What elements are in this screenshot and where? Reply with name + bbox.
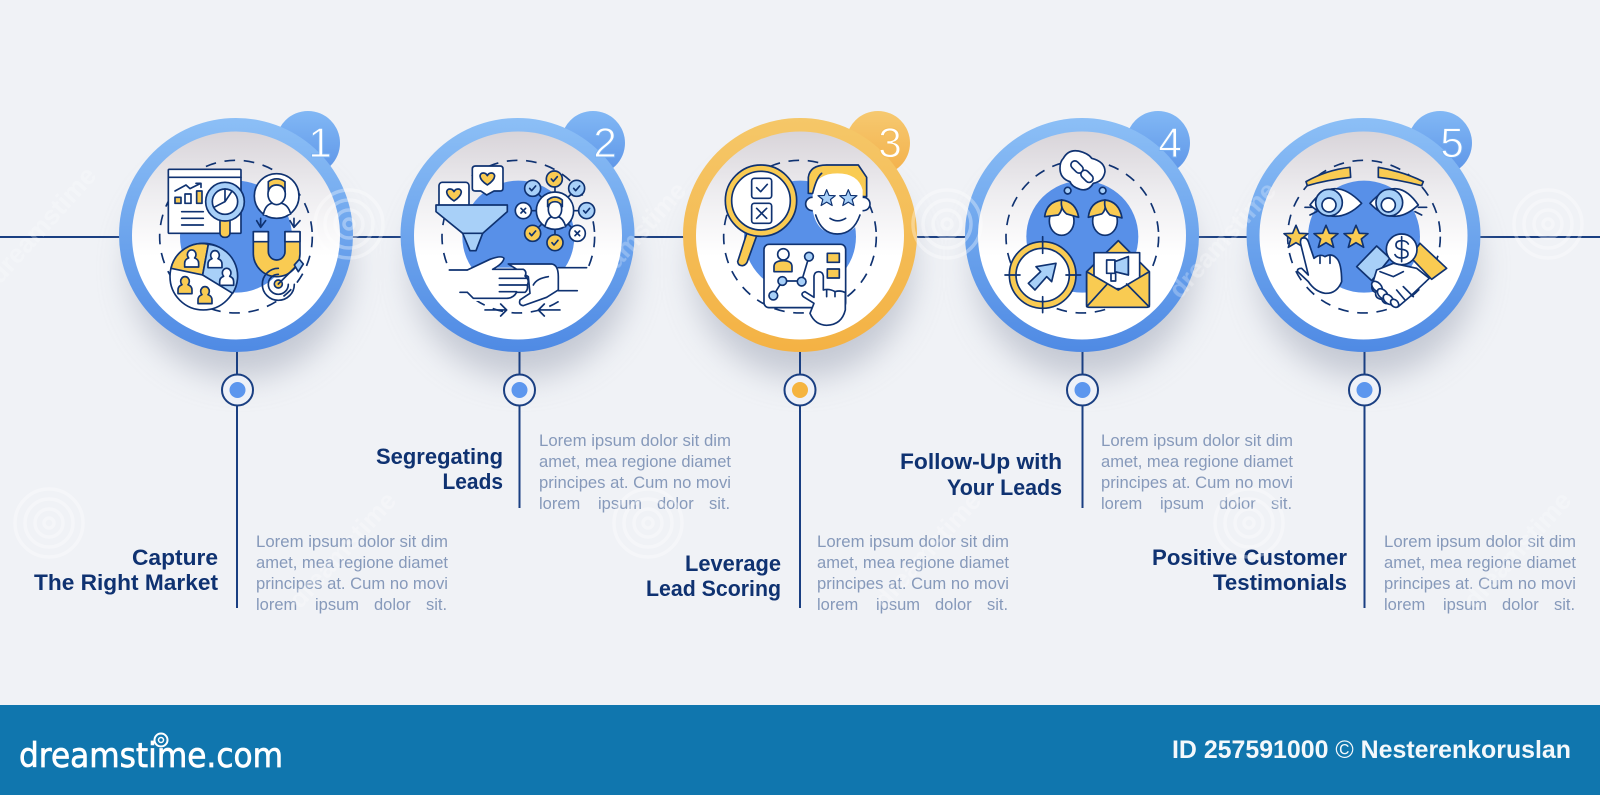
ring 2 bbox=[400, 118, 634, 352]
body text 5 bbox=[1384, 533, 1576, 614]
badge 5 bbox=[1408, 111, 1472, 175]
panel: step 5 bbox=[1152, 111, 1576, 614]
footer bar bbox=[0, 705, 1600, 795]
stem and node 5 bbox=[1349, 350, 1380, 608]
heading 1: Capture bbox=[132, 545, 218, 570]
body text 2: amet, mea regione diamet bbox=[539, 453, 731, 471]
body text 4: Lorem ipsum dolor sit dim bbox=[1101, 432, 1293, 450]
body text 3: ipsum bbox=[876, 596, 920, 614]
body text 5: Lorem ipsum dolor sit dim bbox=[1384, 533, 1576, 551]
body text 1: ipsum bbox=[315, 596, 359, 614]
ring 4 bbox=[965, 118, 1199, 352]
icon: follow-up bbox=[1005, 151, 1159, 313]
badge 4 bbox=[1126, 111, 1190, 175]
inner disc 3 bbox=[696, 132, 904, 340]
body text 2: ipsum bbox=[598, 495, 642, 513]
body text 3: amet, mea regione diamet bbox=[817, 554, 1009, 572]
stem and node 2 bbox=[504, 350, 535, 508]
body text 5: ipsum bbox=[1443, 596, 1487, 614]
panel: step 3 bbox=[646, 111, 1009, 614]
body text 2: lorem bbox=[539, 495, 580, 513]
watermark overlay: dreamstime bbox=[1457, 485, 1577, 614]
body text 2: sit. bbox=[709, 495, 730, 513]
ring 5 bbox=[1246, 118, 1480, 352]
watermark overlay bbox=[0, 160, 1582, 614]
stem and node 4 bbox=[1067, 350, 1098, 508]
body text 4: dolor bbox=[1219, 495, 1256, 513]
inner disc 4 bbox=[978, 132, 1186, 340]
number 2: 2 bbox=[593, 119, 617, 166]
body text 5: dolor bbox=[1502, 596, 1539, 614]
body text 2: principes at. Cum no movi bbox=[539, 474, 731, 492]
body text 1: lorem bbox=[256, 596, 297, 614]
body text 1: amet, mea regione diamet bbox=[256, 554, 448, 572]
body text 5: sit. bbox=[1554, 596, 1575, 614]
watermark overlay: dreamstime bbox=[1162, 175, 1282, 304]
body text 3: principes at. Cum no movi bbox=[817, 575, 1009, 593]
icon: segregating leads bbox=[436, 160, 595, 316]
body text 2: dolor bbox=[657, 495, 694, 513]
inner disc 1 bbox=[132, 132, 340, 340]
body text 4: principes at. Cum no movi bbox=[1101, 474, 1293, 492]
body text 5: amet, mea regione diamet bbox=[1384, 554, 1576, 572]
ring 1 bbox=[119, 118, 353, 352]
body text 5: lorem bbox=[1384, 596, 1425, 614]
ring 3 bbox=[683, 118, 917, 352]
body text 5: principes at. Cum no movi bbox=[1384, 575, 1576, 593]
footer logo: dreamstime.com bbox=[19, 736, 283, 776]
panel: step 4 bbox=[900, 111, 1293, 513]
number 1: 1 bbox=[308, 119, 332, 166]
body text 3 bbox=[817, 533, 1009, 614]
inner disc 2 bbox=[414, 132, 622, 340]
body text 1: dolor bbox=[374, 596, 411, 614]
watermark overlay: dreamstime bbox=[282, 485, 402, 614]
heading 3: Leverage bbox=[685, 551, 781, 576]
stem and node 3 bbox=[784, 350, 816, 608]
badge 2 bbox=[561, 111, 625, 175]
footer credit: ID 257591000 © Nesterenkoruslan bbox=[1172, 736, 1571, 764]
heading 2: Segregating bbox=[376, 444, 503, 469]
body text 1: sit. bbox=[426, 596, 447, 614]
body text 2 bbox=[539, 432, 731, 513]
number 4: 4 bbox=[1158, 119, 1182, 166]
panel: step 1: The Right Market bbox=[34, 570, 219, 595]
body text 3: lorem bbox=[817, 596, 858, 614]
inner disc 5 bbox=[1260, 132, 1468, 340]
body text 4 bbox=[1101, 432, 1293, 513]
heading 5: Positive Customer bbox=[1152, 545, 1347, 570]
stem and node 1 bbox=[222, 350, 253, 608]
panel: step 2: Leads bbox=[442, 469, 503, 494]
body text 4: ipsum bbox=[1160, 495, 1204, 513]
panel: step 4: Your Leads bbox=[947, 475, 1062, 500]
panel: step 3: Lead Scoring bbox=[646, 576, 781, 601]
number 3: 3 bbox=[878, 119, 902, 166]
body text 1 bbox=[256, 533, 448, 614]
body text 4: sit. bbox=[1271, 495, 1292, 513]
body text 4: amet, mea regione diamet bbox=[1101, 453, 1293, 471]
panel: step 2 bbox=[376, 111, 731, 513]
watermark overlay: dreamstime bbox=[867, 485, 987, 614]
panel: step 1 bbox=[34, 111, 448, 614]
body text 1: Lorem ipsum dolor sit dim bbox=[256, 533, 448, 551]
body text 3: sit. bbox=[987, 596, 1008, 614]
badge 1 bbox=[276, 111, 340, 175]
icon: testimonials bbox=[1284, 160, 1447, 313]
heading 4: Follow-Up with bbox=[900, 449, 1062, 474]
icon: market capture bbox=[160, 160, 312, 313]
body text 4: lorem bbox=[1101, 495, 1142, 513]
panel: step 5: Testimonials bbox=[1213, 570, 1347, 595]
body text 2: Lorem ipsum dolor sit dim bbox=[539, 432, 731, 450]
icon: lead scoring bbox=[724, 160, 876, 325]
body text 3: Lorem ipsum dolor sit dim bbox=[817, 533, 1009, 551]
timeline axis bbox=[0, 236, 1600, 238]
body text 1: principes at. Cum no movi bbox=[256, 575, 448, 593]
badge 3 bbox=[846, 111, 910, 175]
watermark overlay: dreamstime bbox=[572, 175, 692, 304]
number 5: 5 bbox=[1440, 119, 1464, 166]
body text 3: dolor bbox=[935, 596, 972, 614]
